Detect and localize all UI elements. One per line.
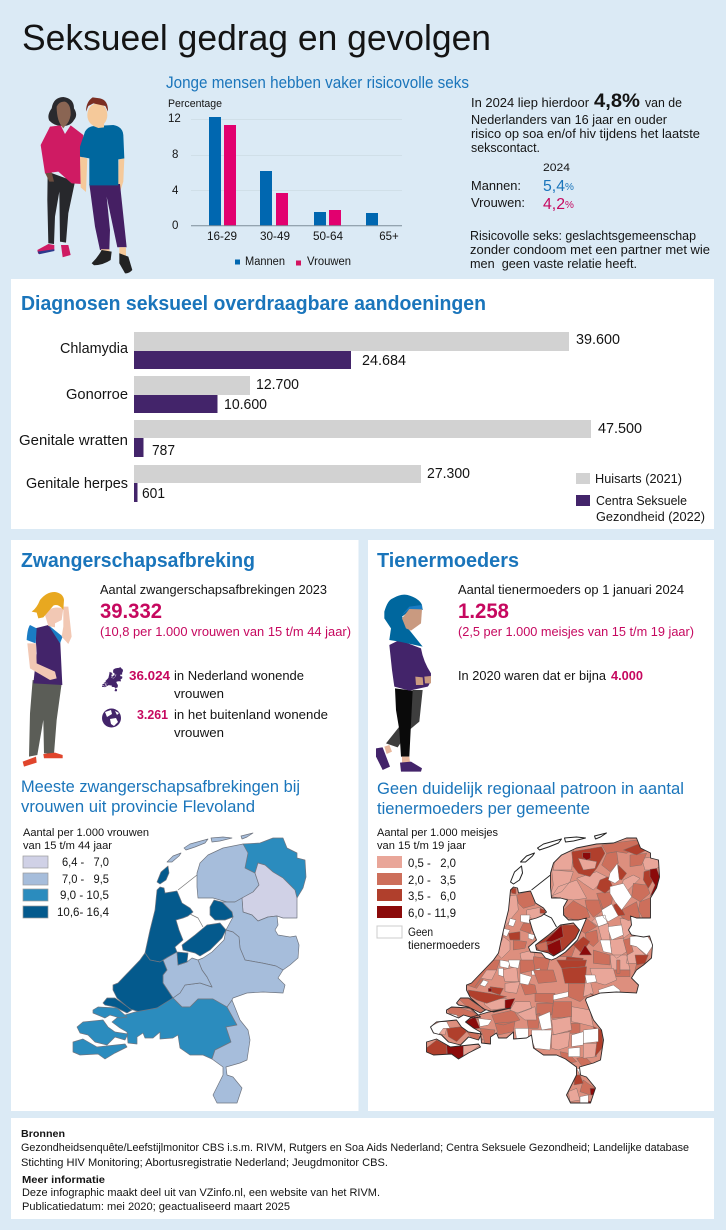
text block: 4,8% <box>471 91 700 155</box>
Zeeland <box>73 1007 128 1059</box>
Limburg <box>212 1000 250 1103</box>
bars: mannen <box>209 117 378 226</box>
map heading <box>377 780 684 818</box>
map heading <box>21 778 300 816</box>
x axis labels: 30-49 <box>260 231 290 243</box>
y axis ticks: 8 <box>172 149 178 161</box>
legend <box>576 472 705 524</box>
stat: 2020: In 2020 waren dat er bijna <box>458 668 607 683</box>
illustration: teen mother <box>376 595 431 772</box>
northern municipalities <box>497 840 661 977</box>
row: Chlamydia: 24.684 <box>362 352 406 369</box>
text block: definitie risicovolle seks <box>470 228 710 271</box>
map legend: tienermoeders <box>408 938 480 952</box>
row: Genitale wratten <box>19 420 642 459</box>
y axis ticks: 12 <box>168 113 181 125</box>
Wadden islands <box>157 833 253 884</box>
y axis ticks: 4 <box>172 185 179 197</box>
row: Genitale herpes: 601 <box>142 485 165 502</box>
row: Gonorroe <box>66 376 299 413</box>
meer informatie: Publicatiedatum: mei 2020; geactualiseerd maart 2025 <box>22 1201 290 1213</box>
stat: aantal: (10,8 per 1.000 vrouwen van 15 t/m 44 jaar) <box>100 624 351 639</box>
legend: Centra Seksuele <box>596 494 687 508</box>
stats: mannen en vrouwen 2024: Mannen: <box>471 178 521 193</box>
stat: in Nederland <box>129 668 304 701</box>
x axis labels: 16-29 <box>207 231 237 243</box>
row: Genitale herpes: 27.300 <box>427 465 470 482</box>
sources: Bronnen <box>21 1128 65 1140</box>
map legend: 2,0 - 3,5 <box>408 873 456 887</box>
panel: zwangerschapsafbreking <box>11 540 358 1111</box>
stat: aantal: Aantal zwangerschapsafbrekingen 2023 <box>100 582 327 597</box>
stats: mannen en vrouwen 2024: 2024 <box>543 162 570 174</box>
bar chart: diagnoses <box>19 331 642 502</box>
stat: in Nederland: 36.024 <box>129 668 171 683</box>
stat: in buitenland: vrouwen <box>174 725 224 740</box>
map legend: 3,5 - 6,0 <box>408 889 456 903</box>
sources: Gezondheidsenquête/Leefstijlmonitor CBS i.s.m. RIVM, Rutgers en Soa Aids Nederland; Centra Seksuele Gezondheid; Landelijke database <box>21 1142 689 1154</box>
map legend: van 15 t/m 44 jaar <box>23 840 112 852</box>
Wadden islands outline <box>510 833 606 884</box>
row: Genitale wratten: 787 <box>152 442 175 459</box>
Friesland <box>197 844 259 902</box>
legend <box>235 256 351 268</box>
row: Genitale herpes <box>26 465 470 502</box>
stat: aantal: Aantal tienermoeders op 1 januari 2024 <box>458 582 684 597</box>
meer informatie: Deze infographic maakt deel uit van VZinfo.nl, een website van het RIVM. <box>22 1187 380 1199</box>
panel: diagnosen soa <box>11 279 714 529</box>
panel: risicovolle seks <box>37 74 710 273</box>
Overijssel <box>222 898 299 970</box>
x axis labels <box>207 231 399 243</box>
text block: 4,8%: sekscontact. <box>471 140 540 155</box>
stat: aantal: (2,5 per 1.000 meisjes van 15 t/m 19 jaar) <box>458 624 694 639</box>
map heading: tienermoeders per gemeente <box>377 800 590 818</box>
Gelderland <box>173 930 285 1008</box>
sources <box>21 1128 689 1169</box>
municipality tiles <box>426 838 660 1102</box>
Zuid-Holland <box>103 953 173 1013</box>
stat: in buitenland: in het buitenland wonende <box>174 707 328 722</box>
x axis labels: 50-64 <box>313 231 344 243</box>
row: Gonorroe: Gonorroe <box>66 386 128 403</box>
illustration: pregnant woman <box>23 592 72 767</box>
heading: Tienermoeders <box>377 550 519 572</box>
icon: globe <box>102 708 121 728</box>
map heading: Geen duidelijk regionaal patroon in aantal <box>377 780 684 798</box>
text block: definitie risicovolle seks: Risicovolle seks: geslachtsgemeenschap <box>470 228 696 243</box>
map: municipalities <box>420 830 670 1110</box>
row: Chlamydia: Chlamydia <box>60 340 129 357</box>
IJsselmeer dikes <box>178 875 203 927</box>
IJsselmeer dikes <box>532 875 556 927</box>
stats: mannen en vrouwen 2024: % <box>565 182 574 193</box>
meer informatie <box>22 1174 380 1213</box>
illustration: couple <box>37 97 132 273</box>
map: provinces <box>73 833 306 1103</box>
map legend: Aantal per 1.000 meisjes <box>377 827 498 839</box>
legend: Huisarts (2021) <box>595 472 682 486</box>
map legend <box>377 827 498 952</box>
map legend: van 15 t/m 19 jaar <box>377 840 466 852</box>
Groningen <box>243 838 306 898</box>
stat: in buitenland <box>137 707 328 740</box>
Noord-Brabant <box>112 998 237 1059</box>
map heading: Meeste zwangerschapsafbrekingen bij <box>21 778 300 796</box>
text block: 4,8%: van de <box>645 95 682 110</box>
text block: 4,8%: 4,8% <box>594 91 640 112</box>
southern municipalities <box>426 960 620 1105</box>
stat: aantal <box>458 582 694 639</box>
map legend: 7,0 - 9,5 <box>62 872 109 886</box>
text block: 4,8%: risico op soa en/of hiv tijdens het laatste <box>471 126 700 141</box>
stat: aantal: 39.332 <box>100 600 162 623</box>
legend: Mannen <box>245 256 285 268</box>
heading: Diagnosen seksueel overdraagbare aandoeningen <box>21 293 486 315</box>
map legend: 9,0 - 10,5 <box>60 888 109 902</box>
x axis labels: 65+ <box>379 231 399 243</box>
chart heading: Jonge mensen hebben vaker risicovolle seks <box>166 74 469 92</box>
stats: mannen en vrouwen 2024: 5,4 <box>543 178 565 195</box>
text block: 4,8%: Nederlanders van 16 jaar en ouder <box>471 112 668 127</box>
meer informatie: Meer informatie <box>22 1174 105 1186</box>
stats: mannen en vrouwen 2024: Vrouwen: <box>471 195 525 210</box>
stat: aantal <box>100 582 351 639</box>
map legend: 6,0 - 11,9 <box>408 906 456 920</box>
icon: Netherlands <box>102 667 123 691</box>
stats: mannen en vrouwen 2024 <box>471 162 574 213</box>
stat: in buitenland: 3.261 <box>137 707 168 722</box>
map legend: Geen <box>408 925 433 939</box>
text block: definitie risicovolle seks: men geen vaste relatie heeft. <box>470 256 637 271</box>
row: Gonorroe: 10.600 <box>224 396 267 413</box>
map legend: Aantal per 1.000 vrouwen <box>23 827 149 839</box>
title: Seksueel gedrag en gevolgen <box>22 17 491 58</box>
text block: 4,8%: In 2024 liep hierdoor <box>471 95 590 110</box>
Utrecht <box>163 952 212 998</box>
stat: aantal: 1.258 <box>458 600 509 623</box>
map legend <box>23 827 149 919</box>
row: Genitale herpes: Genitale herpes <box>26 475 128 492</box>
map heading: vrouwen uit provincie Flevoland <box>21 798 255 816</box>
bar chart: risicovolle seks per leeftijd <box>168 98 402 268</box>
stat: in Nederland: vrouwen <box>174 686 224 701</box>
y axis ticks <box>168 113 181 232</box>
Drenthe <box>242 863 297 921</box>
text block: definitie risicovolle seks: zonder condoom met een partner met wie <box>470 242 710 257</box>
heading: Zwangerschapsafbreking <box>21 550 255 572</box>
legend: Vrouwen <box>307 256 351 268</box>
stat: in Nederland: in Nederland wonende <box>174 668 304 683</box>
row: Gonorroe: 12.700 <box>256 376 299 393</box>
map legend: 6,4 - 7,0 <box>62 855 109 869</box>
legend: Gezondheid (2022) <box>596 510 705 524</box>
map legend: 10,6- 16,4 <box>57 905 109 919</box>
Noord-Holland <box>145 887 193 965</box>
coast outline <box>426 838 660 1103</box>
panel: tienermoeders <box>368 540 714 1111</box>
sources: Stichting HIV Monitoring; Abortusregistratie Nederland; Jeugdmonitor CBS. <box>21 1157 388 1169</box>
Flevoland <box>182 900 233 956</box>
row: Chlamydia: 39.600 <box>576 331 620 348</box>
row: Chlamydia <box>60 331 620 369</box>
row: Genitale wratten: Genitale wratten <box>19 432 128 449</box>
stats: mannen en vrouwen 2024: 4,2 <box>543 196 565 213</box>
row: Genitale wratten: 47.500 <box>598 420 642 437</box>
panel: bronnen <box>11 1118 714 1219</box>
y axis ticks: 0 <box>172 220 178 232</box>
bars: vrouwen <box>224 125 341 226</box>
y axis label: Percentage <box>168 98 222 110</box>
stat: 2020: 4.000 <box>611 668 643 683</box>
map legend: 0,5 - 2,0 <box>408 856 456 870</box>
stats: mannen en vrouwen 2024: % <box>565 200 574 211</box>
